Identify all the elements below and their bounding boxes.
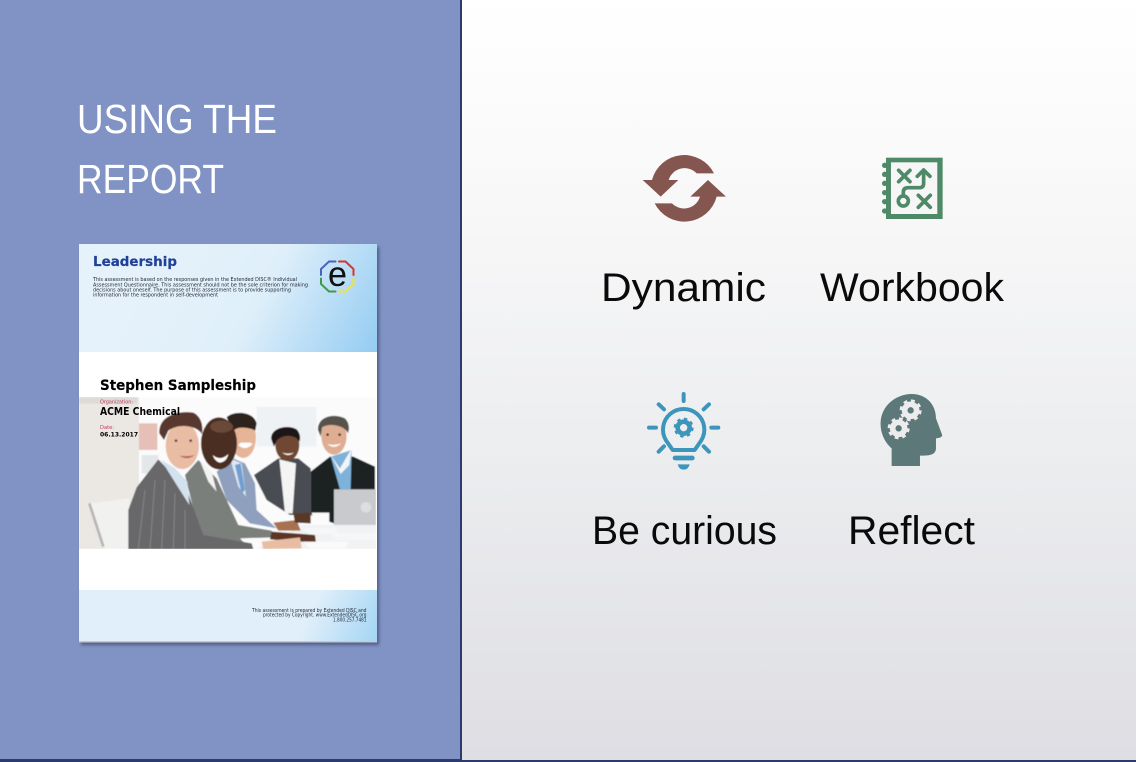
cover footer text: [251, 608, 366, 624]
cover disclaimer text: This assessment is based on the responses given in the Extended DISC® Individual: [92, 276, 297, 283]
cover organization field: ACME Chemical: [100, 406, 180, 418]
cover footer text: protected by Copyright. www.ExtendedDISC.org: [263, 612, 366, 618]
report cover thumbnail: [79, 244, 379, 645]
title: using the report: REPORT: [77, 156, 224, 202]
person two: [185, 460, 273, 549]
title: using the report: USING THE: [77, 96, 277, 142]
person five: [311, 457, 375, 523]
papers, cup, laptop: [302, 528, 337, 534]
cover disclaimer text: [92, 276, 308, 298]
person four: [254, 458, 311, 515]
cover date field: 06.13.2017: [100, 430, 138, 438]
person one: [128, 459, 253, 549]
cover disclaimer text: decisions about oneself. The purpose of this assessment is to provide supporting: [93, 288, 291, 294]
cover heading: leadership: Leadership: [93, 254, 177, 270]
logo: extended disc octagon e: e: [328, 255, 347, 294]
cover disclaimer text: information for the respondent in self-development: [93, 292, 218, 298]
hands on table: [273, 520, 301, 531]
cover name: Stephen Sampleship: [100, 378, 256, 394]
person three: [217, 458, 277, 528]
label: dynamic: Dynamic: [601, 266, 766, 310]
label: workbook: Workbook: [820, 266, 1005, 310]
cover organization field: Organization:: [100, 400, 133, 406]
icon: light bulb with gear: [649, 394, 718, 470]
icon: head with gears: [881, 394, 942, 466]
table: [257, 525, 376, 549]
title: using the report: [77, 96, 277, 202]
cover organization field: [100, 400, 180, 418]
cover disclaimer text: Assessment Questionnaire. This assessment should not be the sole criterion for making: [93, 282, 308, 288]
icon: refresh arrows: [643, 155, 726, 222]
label: be curious: Be curious: [592, 509, 777, 553]
icon: workbook with play diagram: [882, 158, 943, 219]
cover footer text: 1.800.257.7481: [333, 618, 366, 624]
cover footer text: This assessment is prepared by Extended DISC and: [251, 608, 366, 614]
label: reflect: Reflect: [848, 509, 975, 553]
chair: [90, 498, 129, 549]
left blue panel: [0, 0, 460, 762]
cover date field: [100, 425, 138, 438]
logo: extended disc octagon e: [321, 255, 354, 294]
cover photo: business team: [79, 397, 376, 549]
right background panel: [460, 0, 1136, 762]
cover date field: Date:: [100, 425, 114, 431]
